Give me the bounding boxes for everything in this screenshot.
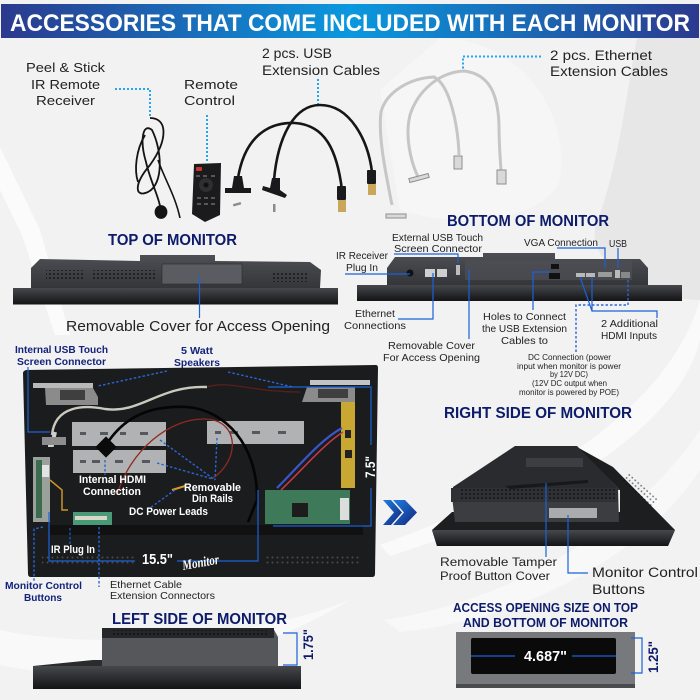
photo: access opening plate [456,632,635,688]
label: external USB touch screen connector [392,232,483,255]
label: monitor control buttons, side: Buttons [592,581,645,597]
label: removable tamper proof button cover [440,557,557,583]
label: peel and stick IR remote receiver: Peel & Stick [26,60,106,75]
label: removable cover for access opening: Removable Cover for Access Opening [66,318,330,335]
label: internal HDMI connection: Internal HDMI [79,474,146,486]
pointer: removable cover [198,276,200,318]
pointer: remote control [206,115,208,162]
label: IR receiver plug in: IR Receiver [336,250,388,262]
label: removable cover for access opening, bottom: For Access Opening [383,352,480,364]
label: internal USB touch screen connector: Internal USB Touch [15,345,108,356]
label: Ethernet cable extension connectors: Extension Connectors [110,590,215,602]
icon: remote control [192,163,221,222]
pointer: internal USB connector [28,367,50,432]
label: USB extension cables [262,46,380,78]
heading: access opening size [453,601,638,630]
heading: bottom of monitor: BOTTOM OF MONITOR [447,213,609,230]
din rails [72,421,304,473]
label: internal HDMI connection [79,474,146,498]
arrow: chevrons to right side view [383,500,417,525]
photo: bottom of monitor [357,253,682,301]
heading: left side of monitor: LEFT SIDE OF MONITOR [112,611,287,628]
label: Ethernet extension cables: Extension Cables [550,64,668,79]
pointers: internal dotted lines [34,438,217,587]
pointer: USB cables [317,79,319,104]
label: external USB touch screen connector: Screen Connector [394,243,483,255]
label: monitor control buttons, side [592,564,698,597]
label: remote control [184,77,238,108]
label: USB extension cables: 2 pcs. USB [262,46,332,61]
label: remote control: Remote [184,77,238,92]
label: 2 additional HDMI inputs [601,318,658,342]
photo: rear of monitor, internal view [23,365,378,587]
label: DC connection note: DC Connection (power [528,353,611,362]
label: DC connection note: (12V DC output when [532,379,607,388]
photo: right side of monitor [432,446,675,546]
label: VGA connection: VGA Connection [524,237,598,249]
label: DC connection note [517,353,621,397]
dimension: 15.5 inches: 15.5" [142,551,173,568]
label: holes to connect USB extension cables: Cables to [501,335,548,347]
icon: IR receiver cable [136,118,180,218]
label: IR plug in: IR Plug In [51,544,95,556]
icon: USB extension cables [225,105,376,212]
bracket: 1.25 inches: 1.25" [645,641,661,673]
label: Ethernet connections: Connections [344,320,406,332]
pointers: bottom of monitor [345,248,657,352]
label: Ethernet connections [344,308,406,332]
label: Ethernet connections: Ethernet [355,308,395,320]
label: remote control: Control [184,93,235,108]
label: holes to connect USB extension cables [482,311,567,347]
photo: left side of monitor [33,628,301,689]
label: monitor control buttons, rear [5,580,82,604]
pointer: Ethernet cables [463,56,541,72]
label: USB: USB [609,238,627,250]
label: DC connection note: monitor is powered by POE) [519,388,619,397]
label: Ethernet extension cables: 2 pcs. Ethernet [550,48,652,63]
label: DC connection note: input when monitor is power [517,362,621,371]
bottom ledge and vents [50,525,363,535]
label: internal USB touch screen connector [15,345,108,368]
heading: top of monitor: TOP OF MONITOR [108,232,237,249]
label: monitor control buttons, rear: Monitor Control [5,580,82,592]
label: monitor control buttons, side: Monitor Control [592,564,698,580]
label: DC connection note: by 12V DC) [550,370,588,379]
dimension: 4.687 inches: 4.687" [524,649,567,665]
label: removable tamper proof button cover: Proof Button Cover [440,571,550,583]
bracket: 1.25 inches [631,638,661,673]
label: 5 watt speakers: 5 Watt [181,346,214,357]
icon: Ethernet extension cables [380,71,506,218]
label: IR receiver plug in [336,250,388,274]
label: 2 additional HDMI inputs: 2 Additional [601,318,658,330]
label: peel and stick IR remote receiver: IR Remote [31,77,100,92]
label: removable cover for access opening, bottom: Removable Cover [388,340,476,352]
label: removable tamper proof button cover: Removable Tamper [440,557,557,569]
label: IR receiver plug in: Plug In [346,262,378,274]
label: USB extension cables: Extension Cables [262,63,380,78]
label: DC power leads: DC Power Leads [129,506,208,518]
circuit boards [33,402,355,530]
dimension lines [49,387,371,561]
pointers: speakers [98,371,293,387]
pointers: right side of monitor [546,483,588,573]
label: monitor control buttons, rear: Buttons [24,592,62,604]
label: removable cover for access opening, bottom [383,340,480,364]
label: peel and stick IR remote receiver [26,60,106,108]
label: internal HDMI connection: Connection [83,486,141,498]
label: removable din rails: Removable [184,482,241,494]
heading: access opening size: AND BOTTOM OF MONITOR [463,616,628,630]
label: 5 watt speakers: Speakers [174,358,220,369]
bracket: 1.75 inches [283,629,316,665]
label: removable din rails: Din Rails [192,493,233,505]
cables inside monitor [42,385,343,522]
label: internal USB touch screen connector: Screen Connector [17,357,106,368]
din rail slots [80,431,286,463]
dimension: 7.5 inches: 7.5" [362,456,378,478]
logo: Monitor: Monitor [180,553,221,574]
internal speakers [33,380,370,405]
label: holes to connect USB extension cables: Holes to Connect [483,311,566,323]
photo: top of monitor [13,255,338,304]
label: 5 watt speakers [174,346,220,369]
label: Ethernet extension cables [550,48,668,79]
label: 2 additional HDMI inputs: HDMI Inputs [601,330,657,342]
label: removable din rails [184,482,241,505]
pointer: IR receiver [115,89,150,117]
heading: right side of monitor: RIGHT SIDE OF MONITOR [444,405,632,422]
label: external USB touch screen connector: External USB Touch [392,232,483,244]
label: holes to connect USB extension cables: the USB Extension [482,323,567,335]
heading: access opening size: ACCESS OPENING SIZE ON TOP [453,601,638,615]
label: peel and stick IR remote receiver: Receiver [36,93,96,108]
bracket: 1.75 inches: 1.75" [300,629,316,660]
label: Ethernet cable extension connectors [110,579,215,602]
label: Ethernet cable extension connectors: Ethernet Cable [110,579,182,591]
